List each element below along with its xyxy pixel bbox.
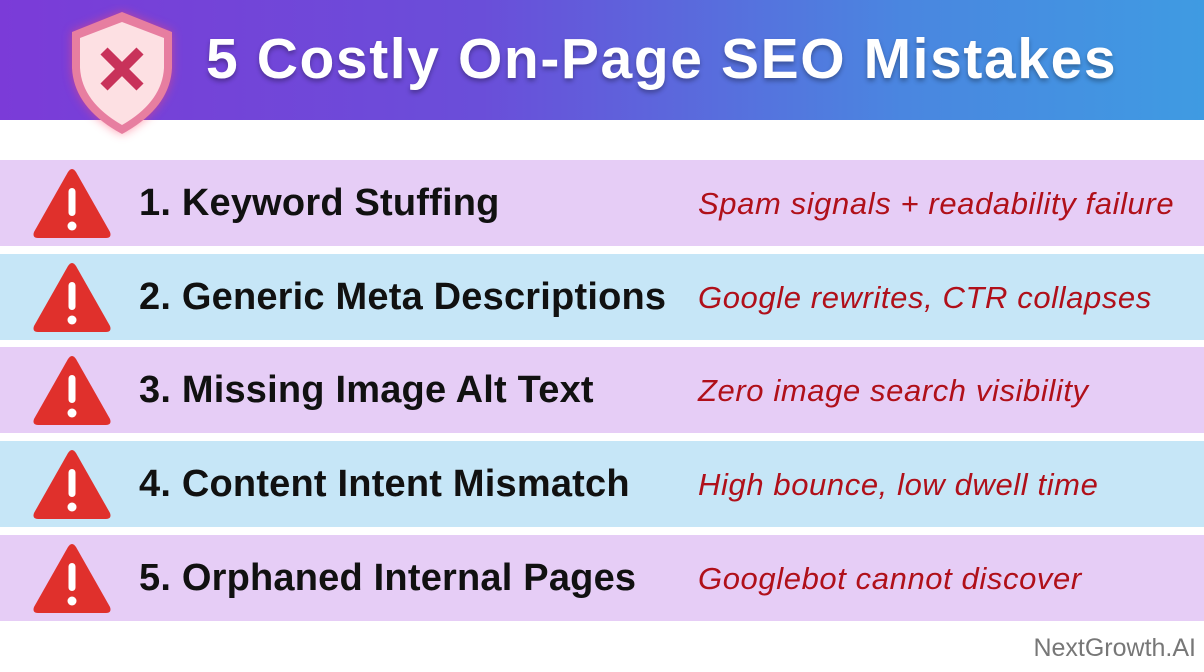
consequence: High bounce, low dwell time bbox=[698, 467, 1098, 502]
mistake name: 3. Missing Image Alt Text bbox=[139, 369, 594, 411]
row 4 bbox=[0, 441, 1204, 527]
icon: warning bbox=[34, 263, 110, 332]
mistake name: 4. Content Intent Mismatch bbox=[139, 463, 630, 505]
icon: warning bbox=[34, 544, 110, 613]
icon: warning bbox=[34, 450, 110, 519]
consequence: Google rewrites, CTR collapses bbox=[698, 280, 1152, 315]
icon: warning bbox=[34, 169, 110, 238]
header banner bbox=[0, 0, 1204, 120]
row 2 bbox=[0, 254, 1204, 340]
brand: NextGrowth.AI bbox=[1033, 634, 1196, 662]
consequence: Zero image search visibility bbox=[698, 373, 1089, 408]
consequence: Spam signals + readability failure bbox=[698, 186, 1174, 221]
mistake name: 5. Orphaned Internal Pages bbox=[139, 557, 636, 599]
consequence: Googlebot cannot discover bbox=[698, 561, 1082, 596]
title: 5 Costly On-Page SEO Mistakes bbox=[206, 27, 1117, 91]
mistake name: 1. Keyword Stuffing bbox=[139, 182, 500, 224]
mistake name: 2. Generic Meta Descriptions bbox=[139, 276, 666, 318]
row 5 bbox=[0, 535, 1204, 621]
row 3 bbox=[0, 347, 1204, 433]
row 1 bbox=[0, 160, 1204, 246]
icon: shield with x bbox=[66, 8, 178, 139]
icon: warning bbox=[34, 356, 110, 425]
